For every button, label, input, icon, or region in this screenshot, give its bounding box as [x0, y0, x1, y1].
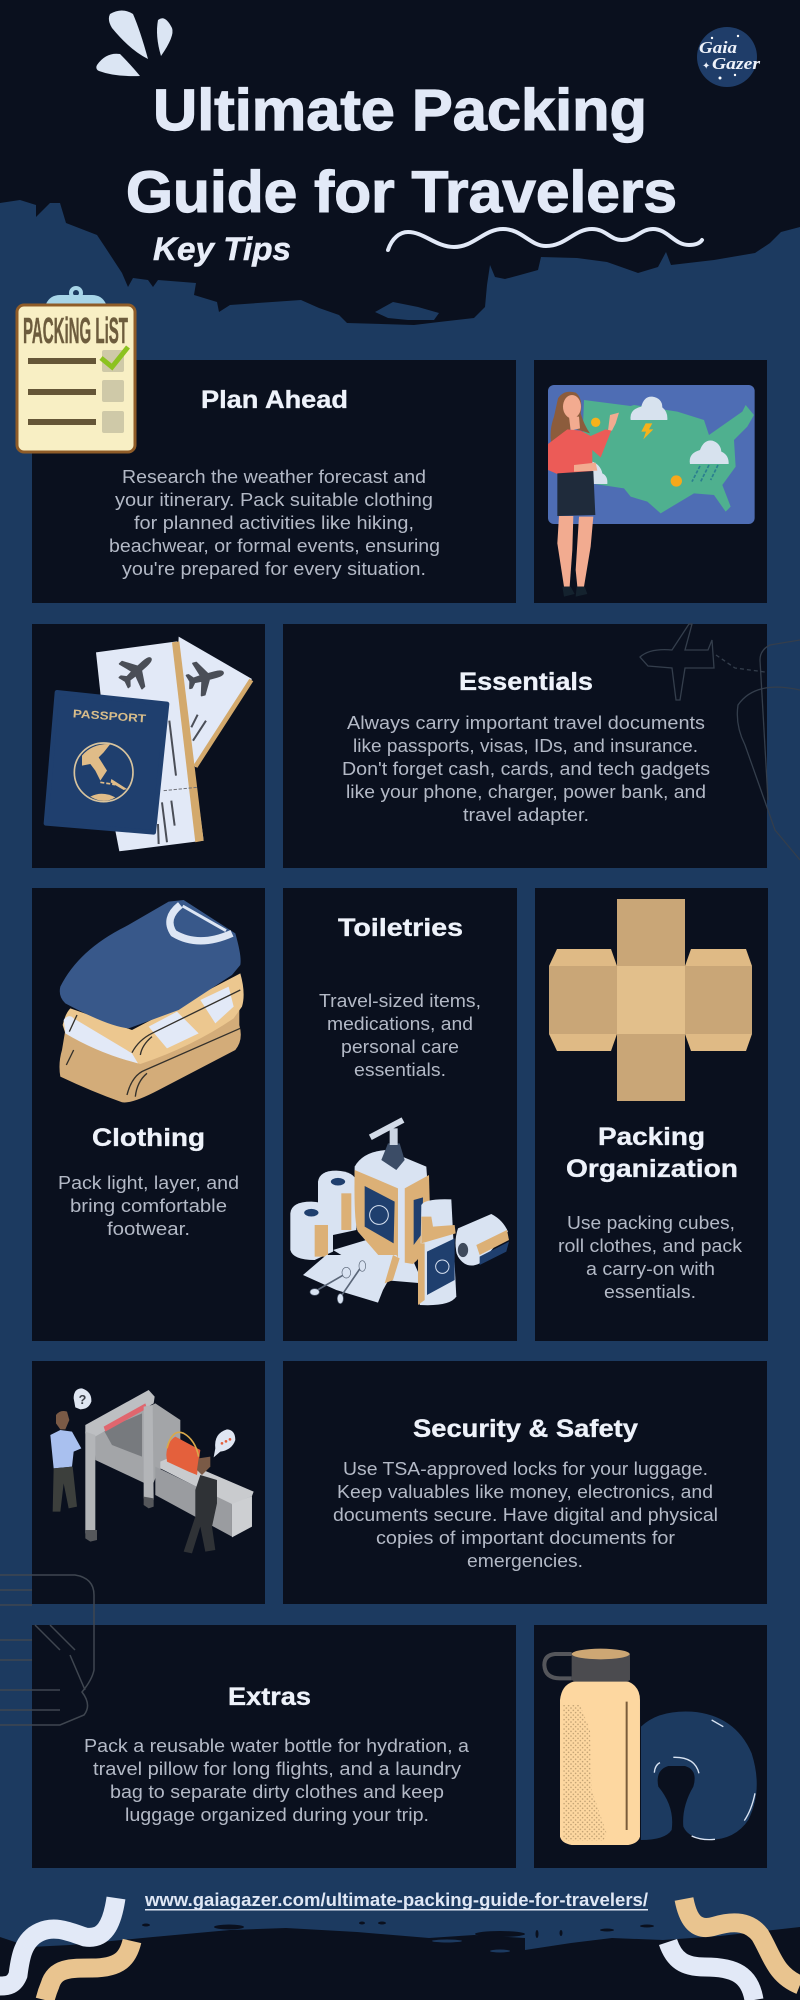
text: essentials body: travel adapter.: [463, 805, 589, 825]
icon: passport and boarding passes: [46, 637, 252, 851]
text: packing organization body: essentials.: [604, 1282, 696, 1302]
heading: Packing Organization: Organization: [566, 1155, 738, 1183]
heading: Security & Safety: Security & Safety: [413, 1415, 638, 1443]
text: extras body: [84, 1736, 470, 1825]
icon: airport security scanner: [50, 1388, 254, 1553]
panel: packing organization: [535, 888, 768, 1341]
text: essentials body: like passports, visas, IDs, and insurance.: [353, 736, 698, 756]
decoration: right ribbons: [668, 1899, 800, 2000]
text: security body: copies of important documents for: [376, 1528, 675, 1548]
heading: Plan Ahead: Plan Ahead: [201, 386, 348, 414]
panel: security and safety: [283, 1361, 767, 1604]
heading: Toiletries: Toiletries: [338, 914, 463, 942]
text: packing organization body: [558, 1213, 743, 1302]
text: security body: Use TSA-approved locks for your luggage.: [343, 1459, 708, 1479]
text: toiletries body: Travel-sized items,: [319, 991, 481, 1011]
logo: Gaia Gazer: [697, 27, 760, 87]
text: clothing body: Pack light, layer, and: [58, 1173, 239, 1193]
text: security body: emergencies.: [467, 1551, 583, 1571]
panel: plan ahead: [32, 360, 516, 603]
text: essentials body: like your phone, charger, power bank, and: [346, 782, 706, 802]
panel: toiletries: [283, 888, 517, 1341]
icon: water bottle and travel pillow: [544, 1649, 757, 1845]
text: essentials body: Don't forget cash, cards, and tech gadgets: [342, 759, 710, 779]
panel: security illustration: [32, 1361, 265, 1604]
text: essentials body: Always carry important travel documents: [347, 713, 705, 733]
icon: folded clothes: [59, 900, 244, 1102]
header torn dark background: [0, 0, 800, 325]
text: packing organization body: roll clothes, and pack: [558, 1236, 743, 1256]
infographic page: PACKiNG LiST: [23, 310, 128, 351]
url link: www.gaiagazer.com/ultimate-packing-guide-for-travelers/: [144, 1890, 648, 1910]
panel: clothing: [32, 888, 265, 1341]
text: clothing body: bring comfortable: [70, 1196, 227, 1216]
text: extras body: Pack a reusable water bottle for hydration, a: [84, 1736, 470, 1756]
title: Guide for Travelers: [126, 160, 677, 225]
text: clothing body: footwear.: [107, 1219, 190, 1239]
icon: faint luggage outline: [0, 1575, 94, 1725]
panel: bottle and pillow: [534, 1625, 767, 1868]
text: essentials body: [342, 713, 710, 825]
text: plan ahead body: [109, 467, 440, 579]
icon: presenter at weather map: [548, 385, 755, 597]
text: plan ahead body: beachwear, or formal events, ensuring: [109, 536, 440, 556]
text: security body: Keep valuables like money, electronics, and: [337, 1482, 713, 1502]
subtitle: Key Tips: Key Tips: [153, 231, 291, 267]
logo: Gaia Gazer: Gaia: [699, 38, 738, 57]
text: security body: documents secure. Have digital and physical: [333, 1505, 718, 1525]
text: plan ahead body: you're prepared for every situation.: [122, 559, 426, 579]
text: extras body: bag to separate dirty clothes and keep: [110, 1782, 444, 1802]
logo: Gaia Gazer: Gazer: [712, 54, 760, 73]
wavy underline: [388, 229, 702, 250]
panel: passport illustration: [32, 624, 265, 868]
text: extras body: luggage organized during your trip.: [125, 1805, 429, 1825]
text: toiletries body: personal care: [341, 1037, 459, 1057]
icon: faint plane and suitcase outlines: [640, 624, 800, 860]
text: plan ahead body: for planned activities like hiking,: [134, 513, 414, 533]
text: plan ahead body: Research the weather forecast and: [122, 467, 426, 487]
title: [126, 78, 677, 225]
icon: toiletries set: [290, 1120, 509, 1305]
title: Ultimate Packing: [153, 78, 647, 143]
icon: airport security scanner: ?: [79, 1393, 86, 1407]
heading: Packing Organization: [566, 1123, 738, 1183]
heading: Clothing: Clothing: [92, 1124, 205, 1152]
heading: Extras: Extras: [228, 1683, 311, 1711]
logo: Gaia Gazer: ✦: [702, 61, 710, 72]
heading: Packing Organization: Packing: [598, 1123, 705, 1151]
text: clothing body: [58, 1173, 239, 1239]
footer torn dark background: [0, 1922, 800, 2000]
icon: flat box template: [549, 899, 752, 1101]
icon: splash accent: [96, 10, 173, 76]
text: extras body: travel pillow for long flights, and a laundry: [93, 1759, 461, 1779]
panel: extras: [32, 1625, 516, 1868]
text: packing organization body: a carry-on with: [586, 1259, 715, 1279]
heading: Essentials: Essentials: [459, 668, 593, 696]
text: security body: [333, 1459, 718, 1571]
icon: passport and boarding passes: PASSPORT: [72, 708, 147, 725]
text: toiletries body: medications, and: [327, 1014, 473, 1034]
panel: essentials: [283, 624, 767, 868]
decoration: left ribbons: [0, 1898, 132, 2000]
panel: weather illustration: [534, 360, 767, 603]
icon: packing list clipboard: [17, 288, 135, 452]
text: toiletries body: [319, 991, 481, 1080]
text: plan ahead body: your itinerary. Pack suitable clothing: [115, 490, 433, 510]
text: toiletries body: essentials.: [354, 1060, 446, 1080]
text: packing organization body: Use packing cubes,: [567, 1213, 735, 1233]
